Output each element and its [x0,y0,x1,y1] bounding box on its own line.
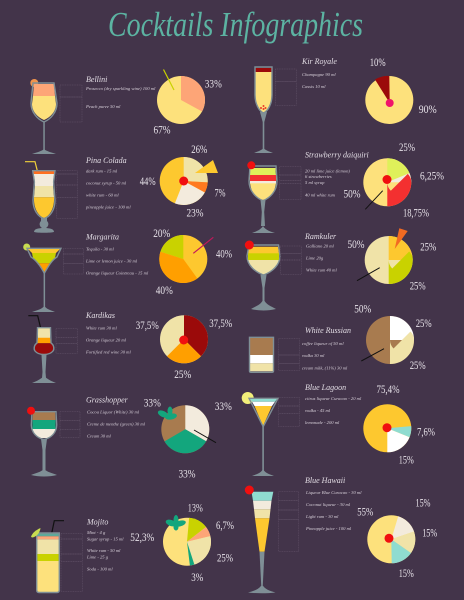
chart: Kardikas pie: 25% [174,367,191,381]
text: Blue Lagoon recipe [305,383,362,425]
text: Blue Hawaii recipe [305,476,362,531]
panel: White Russian [250,301,432,372]
text: Ramkuler recipe [304,232,337,272]
text: Blue Hawaii recipe: Light rum - 30 ml [305,514,339,519]
icon: Kir Royale flute [254,67,273,153]
chart: Mojito pie [130,500,234,584]
text: White Russian recipe: vodka 30 ml [302,353,325,358]
text: Mojito recipe: Soda - 100 ml [87,566,113,572]
panel: Bellini [30,70,222,154]
chart: Blue Hawaii pie: 55% [357,504,373,518]
text: Margarita recipe: Orange liqueur Cointreau - 15 ml [86,270,149,276]
chart: Kardikas pie: 37,5% [209,316,232,330]
chart: Pina Colada pie: 7% [214,186,226,200]
chart: Blue Lagoon pie: 7,6% [417,424,435,438]
chart: Bellini pie [154,70,222,136]
text: Mojito recipe: White rum - 50 ml [87,548,121,553]
chart: Kir Royale pie: 10% [370,55,386,69]
panel: Kir Royale [254,55,437,153]
text: Grasshopper recipe: Cocoa Liquor (White) 30 ml [87,410,140,414]
panel: Strawberry daiquiri [247,140,444,233]
text: Bellini recipe: Prosecco (dry sparkling wine) 100 ml [85,86,156,91]
chart: Mojito pie: 6,7% [216,518,234,532]
icon: White Russian glass [250,337,274,372]
panel: Mojito [31,500,234,592]
text: Bellini recipe [85,75,156,109]
text: Mojito recipe: Lime - 25 g [86,554,109,560]
chart: White Russian pie: 25% [416,316,432,330]
chart: Strawberry daiquiri pie: 25% [399,140,415,154]
text: Strawberry daiquiri recipe: 5 ml syrup [305,180,325,185]
chart: Margarita pie: 40% [216,246,232,260]
text: Grasshopper recipe [86,396,146,438]
chart: Margarita pie [153,226,232,297]
text: Kardikas recipe: Orange liqueur 20 ml [86,338,127,342]
text: Margarita recipe: Tequila - 30 ml [86,246,115,252]
text: Kardikas recipe: Kardikas [85,311,115,320]
icon: mint leaf [157,406,177,420]
icon: Margarita glass [23,244,61,312]
chart: Mojito pie: 3% [191,570,203,584]
chart: Ramkuler pie [348,228,436,293]
text: Mojito recipe: Sugar syrup - 15 ml [87,536,124,542]
chart: Mojito pie: 25% [217,550,233,564]
chart: Kardikas pie [136,315,232,381]
chart: Grasshopper pie [144,395,232,480]
chart: White Russian pie: 25% [410,358,426,372]
text: Pina Colada recipe: white rum - 60 ml [86,192,119,198]
text: Margarita recipe [85,232,149,276]
chart: Grasshopper pie: 33% [144,395,161,409]
text: Ramkuler recipe: Galliano 20 ml [306,244,335,248]
chart: Strawberry daiquiri pie: 6,25% [420,168,444,182]
text: Pina Colada recipe: Pina Colada [85,156,127,165]
icon: Blue Lagoon glass [242,392,278,476]
text: Blue Hawaii recipe: Blue Hawaii [305,476,345,485]
text: Margarita recipe: Lime or lemon juice - 30 ml [85,258,138,264]
icon: Kardikas glass [28,316,56,383]
text: Bellini recipe: Peach puree 50 ml [85,104,121,109]
chart: Grasshopper pie: 33% [215,399,232,413]
chart: Strawberry daiquiri pie [344,140,444,220]
chart: Pina Colada pie: 26% [191,142,207,156]
text: Blue Hawaii recipe: Liqueur Blue Curacao - 30 ml [305,490,362,495]
text: Blue Lagoon recipe: citrus liqueur Curacao - 20 ml [305,396,362,401]
text: Strawberry daiquiri recipe: 6 strawberries [305,174,332,179]
chart: Blue Lagoon pie [363,382,435,466]
text: Strawberry daiquiri recipe: 20 ml lime juice (lemon) [305,168,350,174]
chart: Kir Royale pie: 90% [419,102,437,116]
chart: Strawberry daiquiri pie: 18,75% [403,206,429,220]
chart: Blue Hawaii pie [357,495,437,580]
text: Kardikas recipe [85,311,131,354]
icon: Grasshopper glass [27,407,57,476]
icon: Strawberry daiquiri glass [247,161,277,233]
chart: Pina Colada pie [140,142,226,219]
text: Kir Royale recipe: Cassis 10 ml [302,84,326,89]
panel: Kardikas [28,311,232,383]
text: Pina Colada recipe: dark rum - 15 ml [86,168,118,174]
text: Kir Royale recipe [301,57,337,89]
icon: Ramkuler glass [245,240,280,310]
chart: Ramkuler pie: 25% [410,279,426,293]
title: Cocktails Infographics [108,5,363,44]
chart: Kir Royale pie [365,55,437,124]
icon: Pina Colada glass [25,162,55,233]
chart: Blue Hawaii pie: 15% [416,495,430,509]
text: Pina Colada recipe: pineapple juice - 100 ml [85,204,131,210]
text: White Russian recipe: coffee liqueur of 50 ml [302,341,344,346]
chart: Blue Lagoon pie: 15% [399,452,414,466]
text: Pina Colada recipe: coconut syrup - 50 ml [86,180,127,186]
text: Blue Hawaii recipe: Pineapple juice - 100 ml [305,526,352,531]
chart: Mojito pie: 13% [188,500,203,514]
chart: Blue Hawaii pie: 15% [422,525,437,539]
panel: Grasshopper [27,395,232,480]
text: Ramkuler recipe: White rum 40 ml [306,268,337,272]
text: Grasshopper recipe: Cream 30 ml [87,434,112,438]
chart: Kardikas pie: 37,5% [136,318,159,332]
panel: Pina Colada [25,142,226,233]
chart: Grasshopper pie: 33% [178,466,196,480]
icon: Mojito glass [31,521,64,592]
panel: Blue Lagoon [242,382,435,476]
chart: White Russian pie [354,301,432,372]
chart: Margarita pie: 20% [153,226,170,240]
icon: Bellini glass [30,79,57,154]
text: Mojito recipe [86,518,124,572]
chart: Pina Colada pie: 44% [140,174,156,188]
text: Blue Lagoon recipe: Blue Lagoon [305,383,346,392]
text: Ramkuler recipe: Lime 20g [305,256,324,260]
text: Mojito recipe: Mojito [86,518,108,526]
chart: Strawberry daiquiri pie: 50% [344,186,360,200]
panel: Margarita [23,226,232,312]
chart: Pina Colada pie: 23% [186,205,204,219]
chart: Ramkuler pie: 50% [348,237,364,251]
chart: Ramkuler pie: 25% [420,240,436,254]
text: Margarita recipe: Margarita [85,232,119,242]
text: Grasshopper recipe: Creme de menthe (green) 30 ml [87,422,146,426]
text: White Russian recipe: cream milk, (11%) 30 ml [302,366,348,372]
chart: Blue Hawaii pie: 15% [399,566,414,580]
text: Blue Lagoon recipe: vodka - 45 ml [305,408,331,413]
text: Blue Lagoon recipe: lemonade - 200 ml [305,420,340,425]
text: Ramkuler recipe: Ramkuler [304,232,337,241]
text: Strawberry daiquiri recipe: Strawberry daiquiri [305,150,369,160]
text: Kardikas recipe: Fortified red wine 30 ml [85,350,131,354]
text: Strawberry daiquiri recipe: 40 ml white rum [305,192,336,198]
chart: Margarita pie: 40% [156,283,173,297]
text: Kir Royale recipe: Kir Royale [301,57,337,66]
text: Blue Hawaii recipe: Coconut liqueur - 30 ml [306,502,351,507]
text: Bellini recipe: Bellini [86,75,107,84]
chart: Mojito pie: 52,3% [130,530,154,544]
chart: White Russian pie: 50% [354,301,371,315]
icon: Blue Hawaii glass [245,486,276,593]
panel: Ramkuler [245,228,436,310]
text: White Russian recipe [302,326,351,372]
chart: Blue Lagoon pie: 75,4% [376,382,400,396]
chart: Bellini pie: 33% [205,76,222,90]
text: White Russian recipe: White Russian [305,326,351,335]
text: Pina Colada recipe [85,156,131,210]
text: Mojito recipe: Mint - 4 g [86,530,106,535]
text: Kir Royale recipe: Champagne 90 ml [302,72,336,77]
text: Strawberry daiquiri recipe [305,150,369,198]
text: Kardikas recipe: White rum 30 ml [86,326,117,330]
panel: Blue Hawaii [245,476,437,593]
icon: mint leaf [165,515,187,530]
chart: Bellini pie: 67% [154,122,170,136]
text: Grasshopper recipe: Grasshopper [86,396,129,404]
